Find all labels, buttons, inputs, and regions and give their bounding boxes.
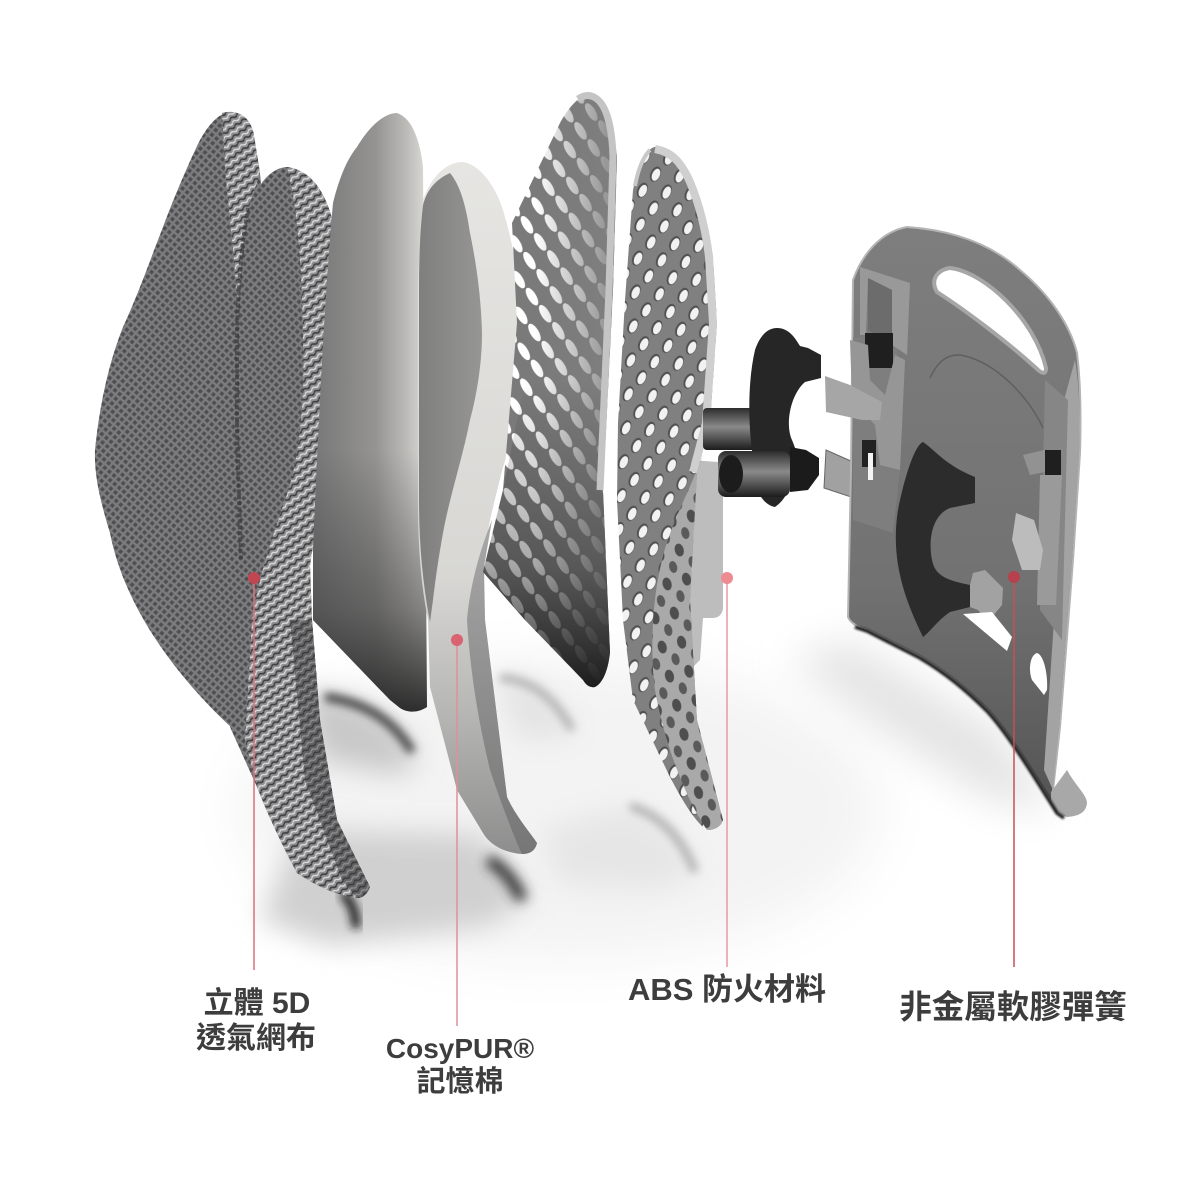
panel: front perforated layer bbox=[617, 147, 723, 830]
label: mesh fabric: 透氣網布 bbox=[196, 1022, 316, 1055]
panel: ABS pad bbox=[690, 460, 723, 670]
callout: foam leader line bbox=[451, 634, 463, 1026]
panel: front foam layer bbox=[418, 162, 537, 854]
callout: spring leader line bbox=[1008, 571, 1020, 967]
callout: mesh leader line bbox=[248, 572, 260, 970]
label: ABS material: ABS 防火材料 bbox=[628, 972, 826, 1007]
panel: back foam layer bbox=[313, 113, 427, 712]
callout: ABS leader line bbox=[721, 572, 733, 967]
icon: black spring connector bbox=[703, 328, 853, 507]
panel: back mesh layer bbox=[95, 112, 300, 728]
label: non-metal spring: 非金屬軟膠彈簧 bbox=[899, 989, 1127, 1025]
icon: plate slot holes bbox=[963, 612, 1047, 695]
floor shadows bbox=[240, 640, 1056, 960]
label: mesh fabric bbox=[196, 987, 316, 1055]
panel: front mesh layer bbox=[230, 167, 370, 898]
label: memory foam: 記憶棉 bbox=[416, 1065, 504, 1098]
label: memory foam: CosyPUR® bbox=[386, 1033, 534, 1064]
label: mesh fabric: 立體 5D bbox=[204, 987, 310, 1020]
panel: back perforated layer bbox=[483, 95, 617, 687]
label: memory foam bbox=[386, 1033, 534, 1098]
panel: back plate bbox=[825, 227, 1087, 818]
